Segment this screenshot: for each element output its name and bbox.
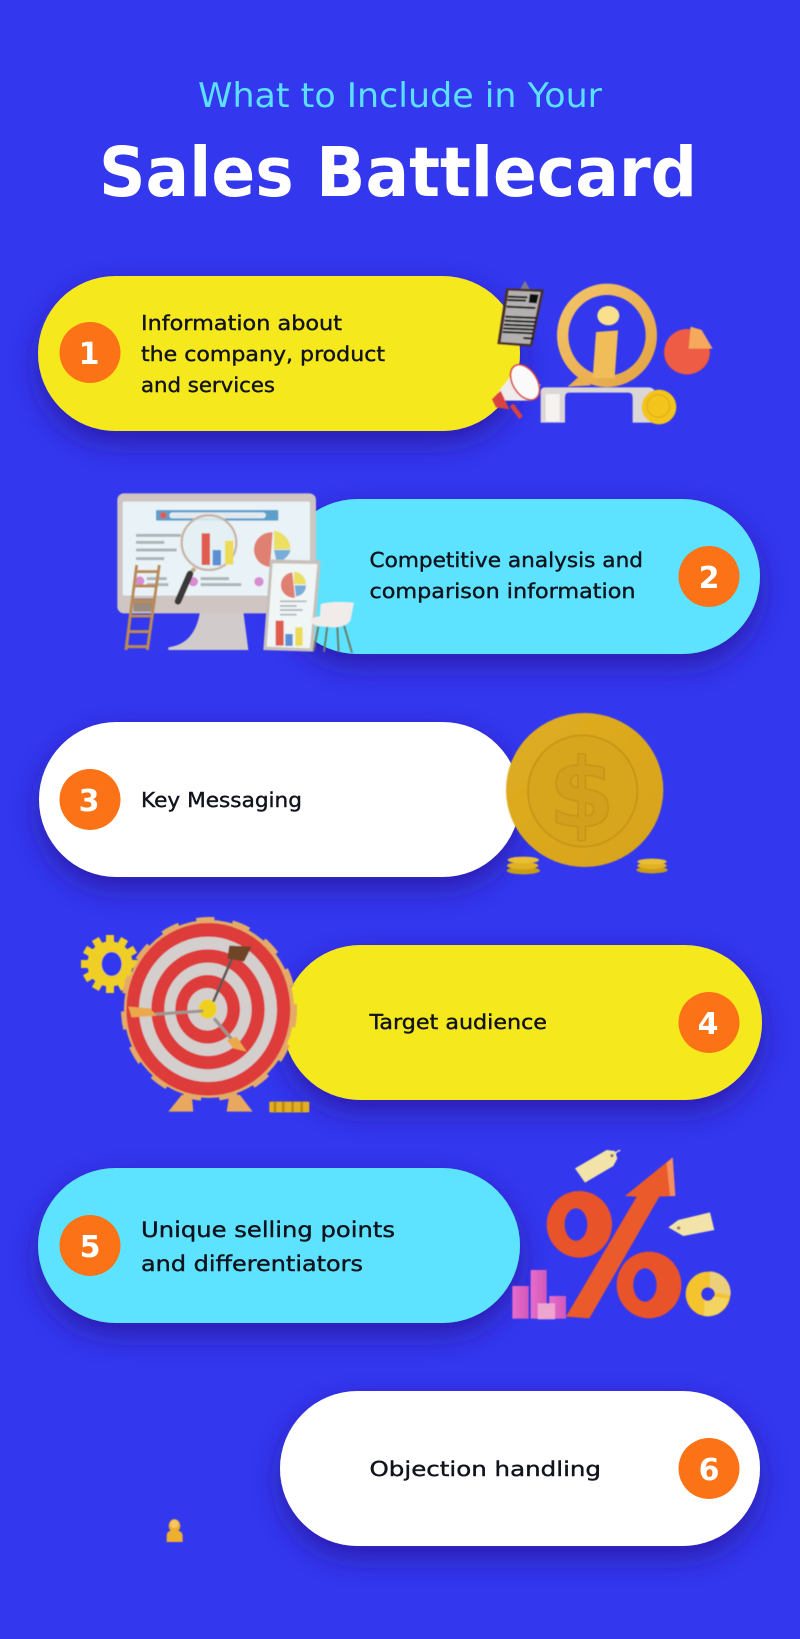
title: What to Include in Your — [198, 76, 602, 116]
text: item 2 — [370, 548, 643, 603]
text: item 5: and differentiators — [141, 1252, 363, 1277]
number badge 1: 1 — [79, 337, 99, 372]
text: item 1: the company, product — [141, 342, 385, 366]
number badge 4: 4 — [698, 1007, 718, 1042]
panel: item 4 — [283, 945, 762, 1100]
text: item 2: comparison information — [370, 579, 636, 603]
icon: target with arrows illustration — [81, 919, 309, 1112]
text: item 1: and services — [141, 373, 275, 397]
panel: item 3 — [39, 722, 520, 877]
text: item 1 — [141, 311, 385, 397]
number badge 2 — [678, 546, 740, 607]
number badge 4 — [678, 992, 740, 1053]
number badge 3 — [60, 769, 120, 830]
number badge 2: 2 — [699, 561, 719, 596]
number badge 5 — [60, 1215, 120, 1276]
panel: item 5 — [38, 1168, 520, 1323]
number badge 1 — [60, 322, 120, 383]
title — [99, 76, 697, 213]
text: item 3: Key Messaging — [141, 788, 302, 812]
number badge 3: 3 — [79, 784, 99, 819]
number badge 5: 5 — [80, 1230, 100, 1265]
text: item 4: Target audience — [368, 1010, 547, 1034]
text: item 5: Unique selling points — [141, 1218, 395, 1243]
title: Sales Battlecard — [99, 133, 697, 213]
panel: item 2 — [280, 499, 760, 654]
icon: gold dollar coin illustration: $ — [549, 740, 615, 850]
text: item 1: Information about — [141, 311, 342, 335]
text: item 6: Objection handling — [370, 1457, 601, 1481]
icon: monitor analytics illustration — [117, 493, 354, 653]
icon: percent and arrow illustration — [512, 1150, 731, 1319]
panel: item 6 — [280, 1391, 760, 1546]
icon: info bubble illustration — [492, 281, 713, 424]
text: item 2: Competitive analysis and — [370, 548, 643, 572]
number badge 6 — [678, 1438, 740, 1499]
text: item 5 — [141, 1218, 395, 1277]
icon: gold dollar coin illustration — [506, 713, 668, 874]
panel: item 1 — [38, 276, 520, 431]
icon: small person figure — [167, 1519, 183, 1542]
number badge 6: 6 — [699, 1453, 719, 1488]
